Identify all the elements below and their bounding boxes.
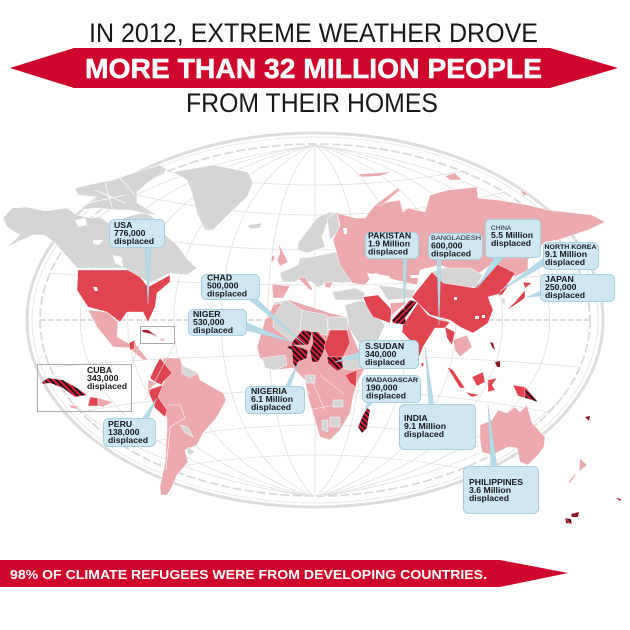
callout: Madagascar bbox=[362, 376, 420, 410]
North America and Arctic land bbox=[3, 165, 262, 360]
callout: Bangladesh: displaced bbox=[431, 248, 471, 258]
callout: China: CHINA bbox=[491, 225, 512, 232]
callout: Japan bbox=[527, 274, 614, 302]
callout: Chad: CHAD bbox=[207, 272, 232, 282]
callout: Philippines: PHILIPPINES bbox=[469, 477, 523, 487]
callout: Niger: displaced bbox=[193, 325, 233, 335]
callout: Bangladesh: BANGLADESH bbox=[431, 235, 481, 242]
callout: Pakistan: displaced bbox=[368, 246, 408, 256]
callout: Madagascar: MADAGASCAR bbox=[366, 377, 418, 384]
Russia and Asia bbox=[333, 172, 621, 524]
callout: Niger: NIGER bbox=[193, 309, 221, 319]
callout: S. Sudan: S.SUDAN bbox=[365, 341, 404, 351]
callout: Pakistan: PAKISTAN bbox=[368, 230, 411, 240]
title line 3: FROM THEIR HOMES bbox=[186, 88, 438, 118]
callout: North Korea bbox=[500, 242, 598, 291]
callout: China: 5.5 Million bbox=[491, 230, 533, 240]
red banner: MORE THAN 32 MILLION PEOPLE bbox=[85, 53, 542, 84]
callout: Niger bbox=[188, 309, 293, 342]
callout: Bangladesh: 600,000 bbox=[431, 240, 463, 250]
callout: Chad: 500,000 bbox=[207, 280, 239, 290]
callout: USA: USA bbox=[114, 220, 133, 230]
callout: North Korea: 9.1 Million bbox=[545, 249, 587, 259]
callout: China bbox=[477, 220, 540, 288]
callout: Peru: PERU bbox=[108, 419, 132, 429]
callout: S. Sudan bbox=[335, 340, 418, 368]
callout: Madagascar: displaced bbox=[366, 390, 406, 400]
callout: Nigeria: displaced bbox=[251, 402, 291, 412]
Cuba inset: 343,000 bbox=[87, 373, 119, 383]
title line 1: IN 2012, EXTREME WEATHER DROVE bbox=[89, 18, 538, 48]
callout: India: displaced bbox=[404, 429, 444, 439]
callout: Nigeria: NIGERIA bbox=[251, 386, 288, 396]
callout: USA: 776,000 bbox=[114, 228, 146, 238]
callout: USA: displaced bbox=[114, 236, 154, 246]
bottom banner bbox=[0, 560, 568, 587]
callout: India: INDIA bbox=[404, 413, 428, 423]
callout: Nigeria: 6.1 Million bbox=[251, 394, 293, 404]
callout: USA bbox=[110, 220, 164, 304]
callout: Peru: 138,000 bbox=[108, 427, 140, 437]
callout: Japan: JAPAN bbox=[545, 274, 574, 284]
callout: Japan: 250,000 bbox=[545, 282, 577, 292]
callout: Chad bbox=[202, 272, 305, 345]
bottom banner: 98% OF CLIMATE REFUGEES WERE FROM DEVELOPING COUNTRIES. bbox=[10, 567, 487, 582]
globe frame and graticule bbox=[20, 130, 610, 510]
Cuba inset bbox=[38, 326, 175, 412]
callout: Chad: displaced bbox=[207, 288, 247, 298]
callout: Peru bbox=[104, 398, 157, 446]
callout: Nigeria bbox=[246, 363, 304, 414]
callout: North Korea: displaced bbox=[545, 257, 585, 267]
callout: S. Sudan: displaced bbox=[365, 357, 405, 367]
callout: Philippines: displaced bbox=[469, 493, 509, 503]
callout: India bbox=[400, 347, 476, 450]
callout: Peru: displaced bbox=[108, 435, 148, 445]
callout: Pakistan: 1.9 Million bbox=[368, 238, 410, 248]
Africa bbox=[257, 300, 370, 440]
callout: Pakistan bbox=[366, 230, 418, 310]
callout: Japan: displaced bbox=[545, 290, 585, 300]
callout: Bangladesh bbox=[428, 234, 482, 325]
Cuba inset: CUBA bbox=[87, 365, 113, 375]
callout: Philippines: 3.6 Million bbox=[469, 485, 511, 495]
world map bbox=[3, 130, 621, 524]
callout: North Korea: NORTH KOREA bbox=[544, 244, 597, 251]
callout: Niger: 530,000 bbox=[193, 317, 225, 327]
Europe and Middle East bbox=[271, 212, 415, 347]
callout: China: displaced bbox=[491, 238, 531, 248]
Cuba inset: displaced bbox=[87, 381, 127, 391]
callout: S. Sudan: 340,000 bbox=[365, 349, 397, 359]
callout: Philippines bbox=[464, 405, 538, 514]
red banner bbox=[10, 48, 618, 88]
callout: Madagascar: 190,000 bbox=[366, 382, 398, 392]
callout: India: 9.1 Million bbox=[404, 421, 446, 431]
South America bbox=[148, 358, 226, 495]
